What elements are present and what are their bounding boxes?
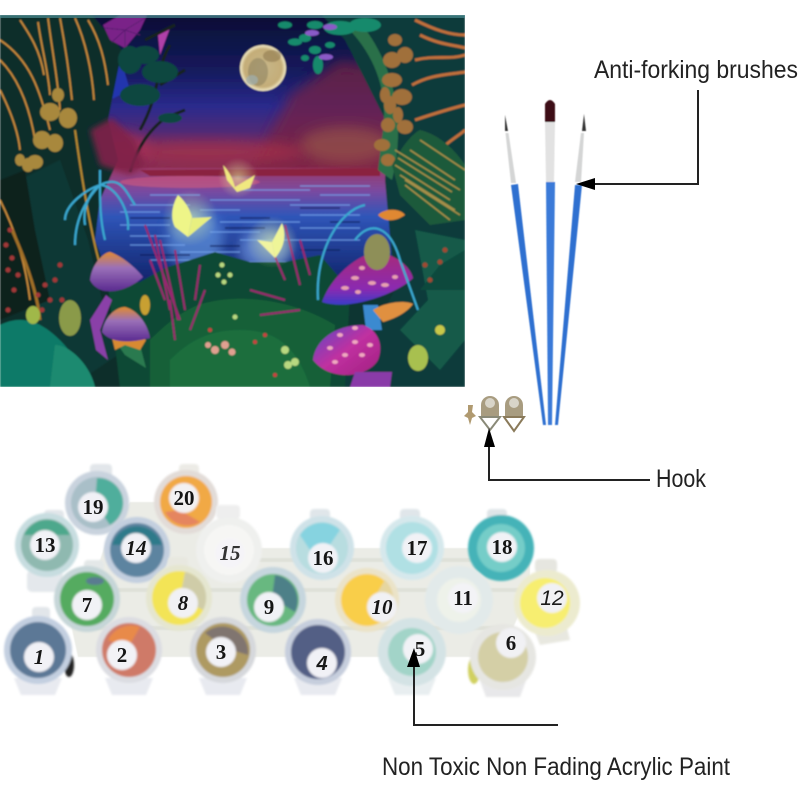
right foliage mass [322,15,465,387]
pot 6: 6 [506,631,516,655]
pot 1: 1 [34,645,44,669]
arrow: paint callout [407,648,558,725]
pot 7 [54,560,120,632]
butterflies [162,158,298,268]
pot 3 [190,617,256,695]
blue spider plant [65,170,135,245]
top leaves [278,18,381,74]
brushes [505,100,586,425]
pot 4 [285,619,351,695]
icon: screw [464,405,476,425]
pot 12 [514,559,580,645]
pot 6 [468,624,536,697]
foreground meadow [108,252,350,387]
pot 10: 10 [372,595,393,619]
arrow: brushes callout [576,90,698,190]
pot 12: 12 [540,587,564,610]
pot 18 [468,509,534,581]
pot 19 [65,464,129,535]
pot 8 [146,557,212,631]
pot 15: 15 [220,541,240,565]
right mushrooms [363,305,382,330]
pot 14: 14 [126,536,146,560]
pot 16: 16 [312,546,334,570]
label: hook: Hook [656,465,706,493]
icon: hook 1 [480,396,500,430]
pot 5 [378,618,446,695]
left mushrooms [90,295,112,360]
top flower and branches [103,15,147,48]
pot 4: 4 [315,653,328,675]
hooks and screw [464,396,524,431]
pot 2 [96,617,162,695]
pot 19: 19 [82,495,104,519]
pot 9: 9 [264,595,274,619]
arrow: hook callout [484,428,650,480]
pot 8: 8 [178,591,189,615]
left foliage mass [24,16,122,384]
pot 20 [154,464,218,534]
pot 11: 11 [453,586,473,610]
pot 20: 20 [174,486,194,510]
brush: center [545,100,555,425]
brush: right [555,114,586,425]
pot 13: 13 [34,533,56,557]
pot 1 [4,607,74,695]
pot 10 [335,568,399,632]
paint pots [4,464,580,697]
brush: left [505,115,546,425]
paint tray [70,502,530,657]
moon [240,45,286,91]
pot 9 [240,567,306,633]
icon: hook 2 [504,396,524,431]
pot 15 [196,505,262,583]
pot 17: 17 [406,536,428,560]
label: paint: Non Toxic Non Fading Acrylic Paint [382,753,730,781]
pot 18: 18 [492,535,512,559]
pot 7: 7 [82,593,92,617]
painting: moonlit lake with butterflies and mushrooms [0,15,465,387]
pot 14 [104,517,170,583]
pot 5: 5 [415,637,425,661]
pot 3: 3 [216,640,226,664]
pot 11 [425,566,493,634]
pot 2: 2 [117,643,127,667]
pot 16 [290,509,354,580]
pot 13 [15,510,79,592]
pot 17 [380,509,444,580]
